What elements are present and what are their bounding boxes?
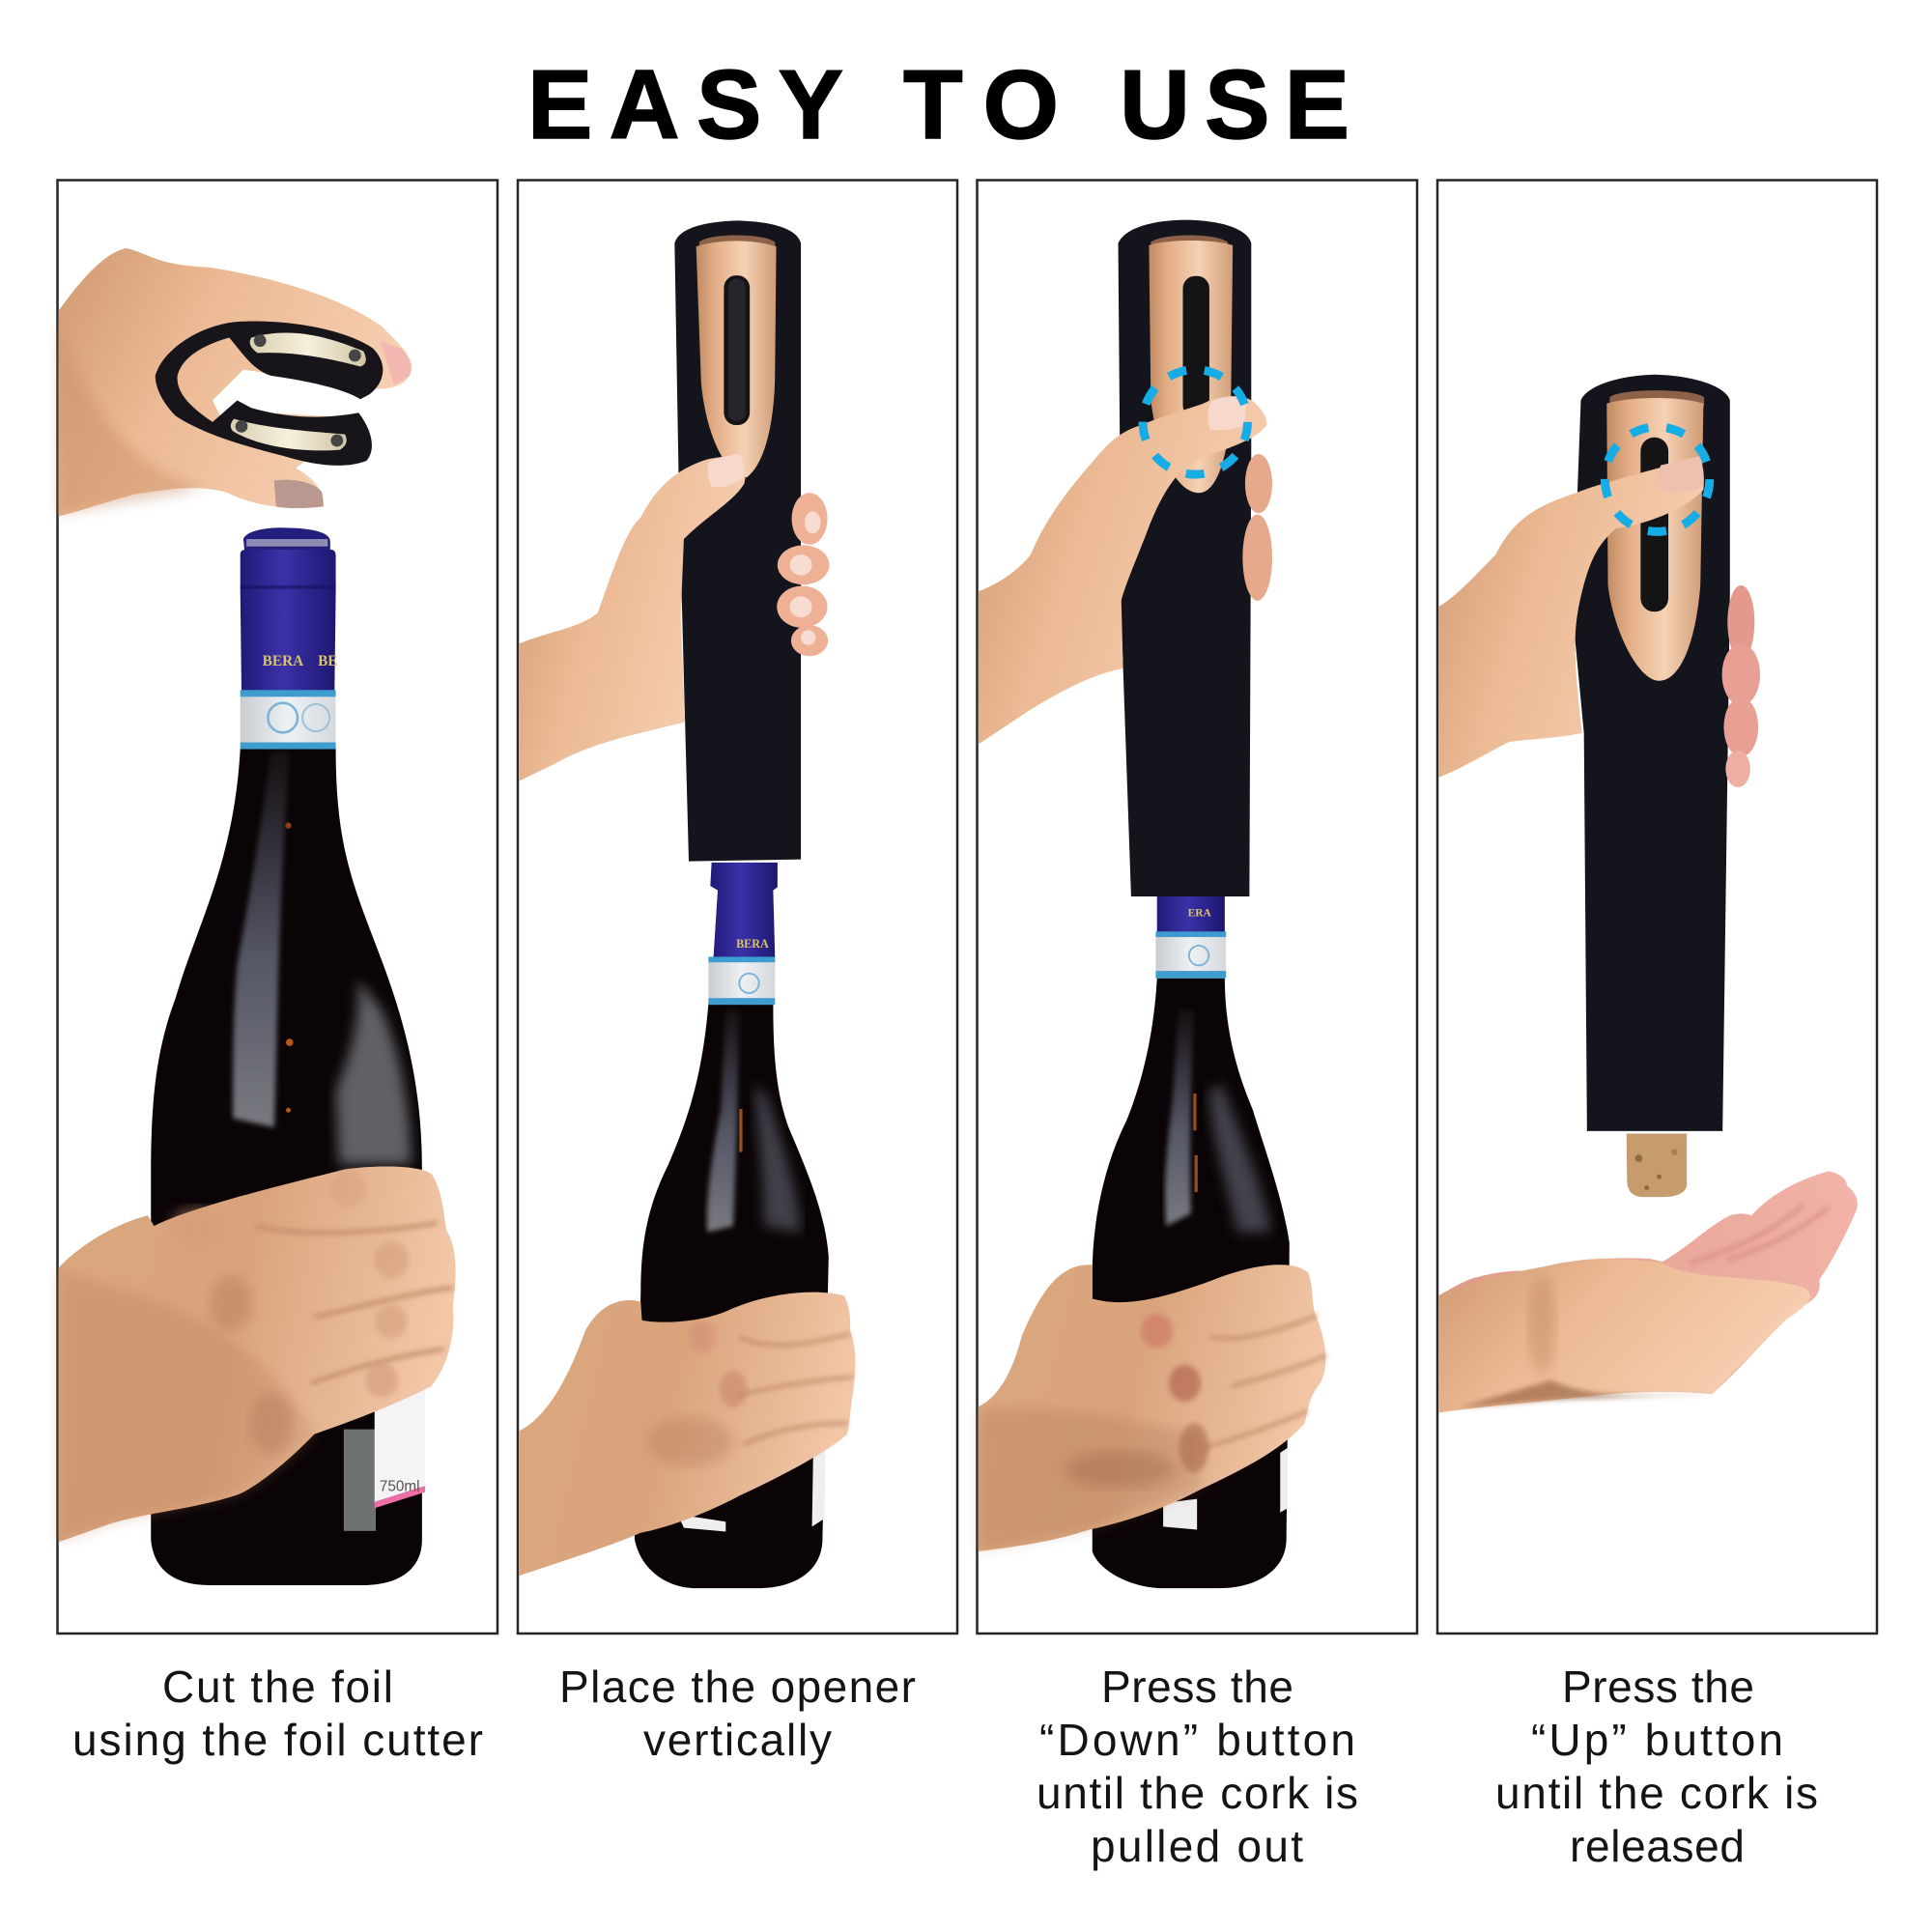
caption: step 3: “Down” button xyxy=(1039,1715,1355,1765)
caption: step 2: Place the opener xyxy=(559,1662,916,1712)
caption: step 4: until the cork is xyxy=(1495,1768,1818,1818)
icon: bottle with foil xyxy=(635,863,829,1588)
icon: electric opener xyxy=(1573,375,1730,1131)
icon: bottle with foil: ERA xyxy=(1188,907,1212,919)
icon: foil capsule xyxy=(241,527,337,750)
icon: blue dashed circle xyxy=(1605,427,1710,531)
title: USE xyxy=(1120,51,1350,159)
icon: hand holding foil cutter xyxy=(59,248,412,516)
caption: step 4 xyxy=(1495,1662,1818,1871)
icon: hand on opener xyxy=(519,454,829,781)
caption: step 4: released xyxy=(1570,1821,1745,1871)
caption: step 4: Press the xyxy=(1562,1662,1754,1712)
icon: bottle: 750ml xyxy=(380,1478,420,1494)
caption: step 3: until the cork is xyxy=(1037,1768,1358,1818)
icon: bottle xyxy=(151,749,425,1585)
icon: hand gripping bottle xyxy=(59,1166,456,1542)
icon: hand pressing button xyxy=(1438,456,1760,787)
icon: bottle with foil xyxy=(1093,896,1290,1588)
title: EASY xyxy=(527,51,843,159)
caption: step 4: “Up” button xyxy=(1531,1715,1783,1765)
icon: foil cutter xyxy=(156,322,383,466)
caption: step 1 xyxy=(72,1662,483,1765)
icon: open palm hand xyxy=(1438,1171,1858,1412)
caption: step 1: Cut the foil xyxy=(162,1662,393,1712)
icon: bottle with foil: BERA xyxy=(736,937,769,951)
title: TO xyxy=(903,51,1059,159)
caption: step 3: Press the xyxy=(1101,1662,1293,1712)
icon: foil capsule: BERA xyxy=(263,653,303,669)
icon: electric opener xyxy=(1119,220,1251,896)
icon: foil capsule: BE xyxy=(318,653,337,669)
panel: step 4 press up button xyxy=(1437,180,1877,1634)
icon: hand gripping bottle xyxy=(979,1264,1326,1551)
panel: step 2 place the opener xyxy=(518,180,957,1634)
icon: blue dashed circle xyxy=(1143,370,1247,474)
title xyxy=(527,51,1350,159)
caption: step 2 xyxy=(559,1662,916,1765)
icon: cork xyxy=(1627,1133,1687,1197)
icon: hand gripping bottle xyxy=(519,1293,855,1576)
panel: step 3 press down button xyxy=(978,180,1417,1634)
caption: step 2: vertically xyxy=(643,1715,832,1765)
icon: hand pressing button xyxy=(979,396,1272,744)
icon: electric opener xyxy=(674,220,801,862)
caption: step 3 xyxy=(1037,1662,1358,1871)
caption: step 1: using the foil cutter xyxy=(72,1715,483,1765)
panel: step 1 cut the foil xyxy=(58,180,497,1634)
caption: step 3: pulled out xyxy=(1091,1821,1303,1871)
